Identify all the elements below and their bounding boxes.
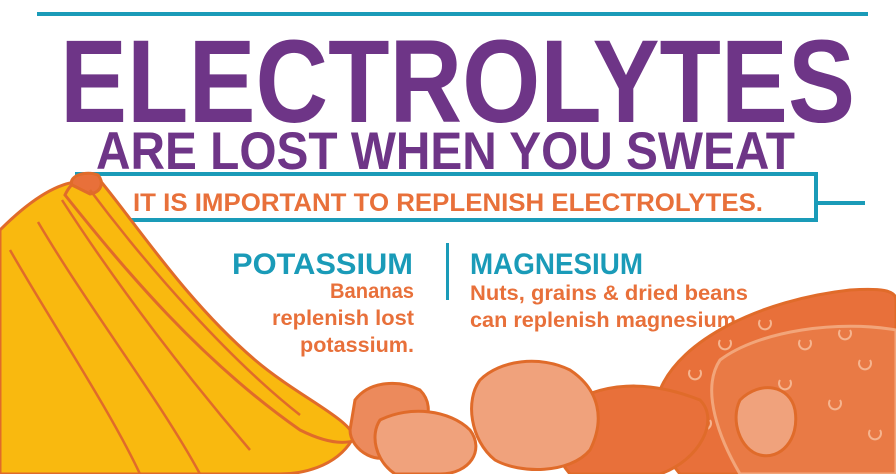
- heading: potassium: POTASSIUM: [232, 248, 413, 281]
- subtitle: ARE LOST WHEN YOU SWEAT: [96, 122, 795, 181]
- text: potassium body: Bananas: [330, 280, 414, 303]
- icon: bananas: [0, 173, 356, 474]
- text: potassium body: [272, 280, 414, 357]
- text: magnesium body: Nuts, grains & dried beans: [470, 282, 748, 305]
- banner box: IT IS IMPORTANT TO REPLENISH ELECTROLYTES.: [133, 189, 763, 217]
- top rule: [37, 12, 868, 16]
- heading: magnesium: MAGNESIUM: [470, 248, 643, 281]
- text: magnesium body: [470, 282, 748, 332]
- banner box: [35, 174, 865, 220]
- text: magnesium body: can replenish magnesium.: [470, 309, 742, 332]
- text: potassium body: potassium.: [300, 334, 414, 357]
- icon: nuts and beans: [350, 289, 896, 474]
- divider: [446, 243, 449, 300]
- text: potassium body: replenish lost: [272, 307, 414, 330]
